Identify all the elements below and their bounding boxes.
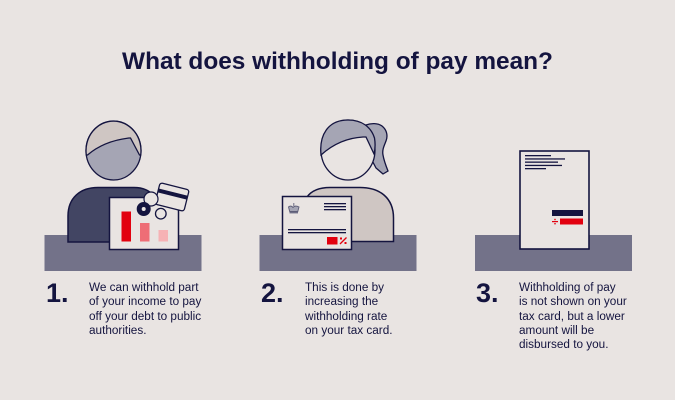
person 1 body bbox=[68, 188, 154, 242]
panel 1 illustration bbox=[44, 121, 202, 271]
step 3 text: amount will be bbox=[519, 324, 594, 337]
step 1 number: 1. bbox=[46, 278, 69, 308]
step 1 text: of your income to pay bbox=[89, 295, 201, 308]
document with bar chart bbox=[110, 198, 178, 250]
step 2 number: 2. bbox=[261, 278, 284, 308]
step 3 text: tax card, but a lower bbox=[519, 310, 625, 323]
desk 3 bbox=[475, 235, 632, 271]
icon: division sign bbox=[552, 219, 558, 224]
icon: crown bbox=[288, 203, 299, 213]
coins bbox=[139, 192, 166, 219]
step 2 text bbox=[305, 281, 393, 337]
icon: percent bbox=[340, 238, 346, 244]
step 3 number: 3. bbox=[476, 278, 499, 308]
credit card bbox=[155, 183, 189, 211]
step 3 text bbox=[519, 281, 627, 351]
step 2 text: increasing the bbox=[305, 295, 378, 308]
step 3 text: is not shown on your bbox=[519, 295, 627, 308]
step 1 text bbox=[89, 281, 202, 337]
step 2 text: withholding rate bbox=[305, 310, 387, 323]
desk 1 bbox=[44, 235, 202, 271]
step 2 text: on your tax card. bbox=[305, 324, 393, 337]
step 1 text: off your debt to public bbox=[89, 310, 201, 323]
panel 2 illustration bbox=[260, 120, 416, 271]
person 2 body bbox=[307, 188, 394, 242]
step 1 text: We can withhold part bbox=[89, 281, 199, 294]
title: What does withholding of pay mean? bbox=[122, 48, 553, 75]
letter with crown and percent bbox=[282, 196, 352, 250]
panel 3 illustration bbox=[475, 151, 632, 271]
document bbox=[520, 151, 589, 249]
step 3 text: Withholding of pay bbox=[519, 281, 616, 294]
person 1 head bbox=[86, 121, 141, 180]
step 1 text: authorities. bbox=[89, 324, 146, 337]
step 2 text: This is done by bbox=[305, 281, 384, 294]
person 2 head with ponytail bbox=[321, 120, 388, 180]
desk 2 bbox=[260, 235, 416, 271]
step 3 text: disbursed to you. bbox=[519, 338, 608, 351]
